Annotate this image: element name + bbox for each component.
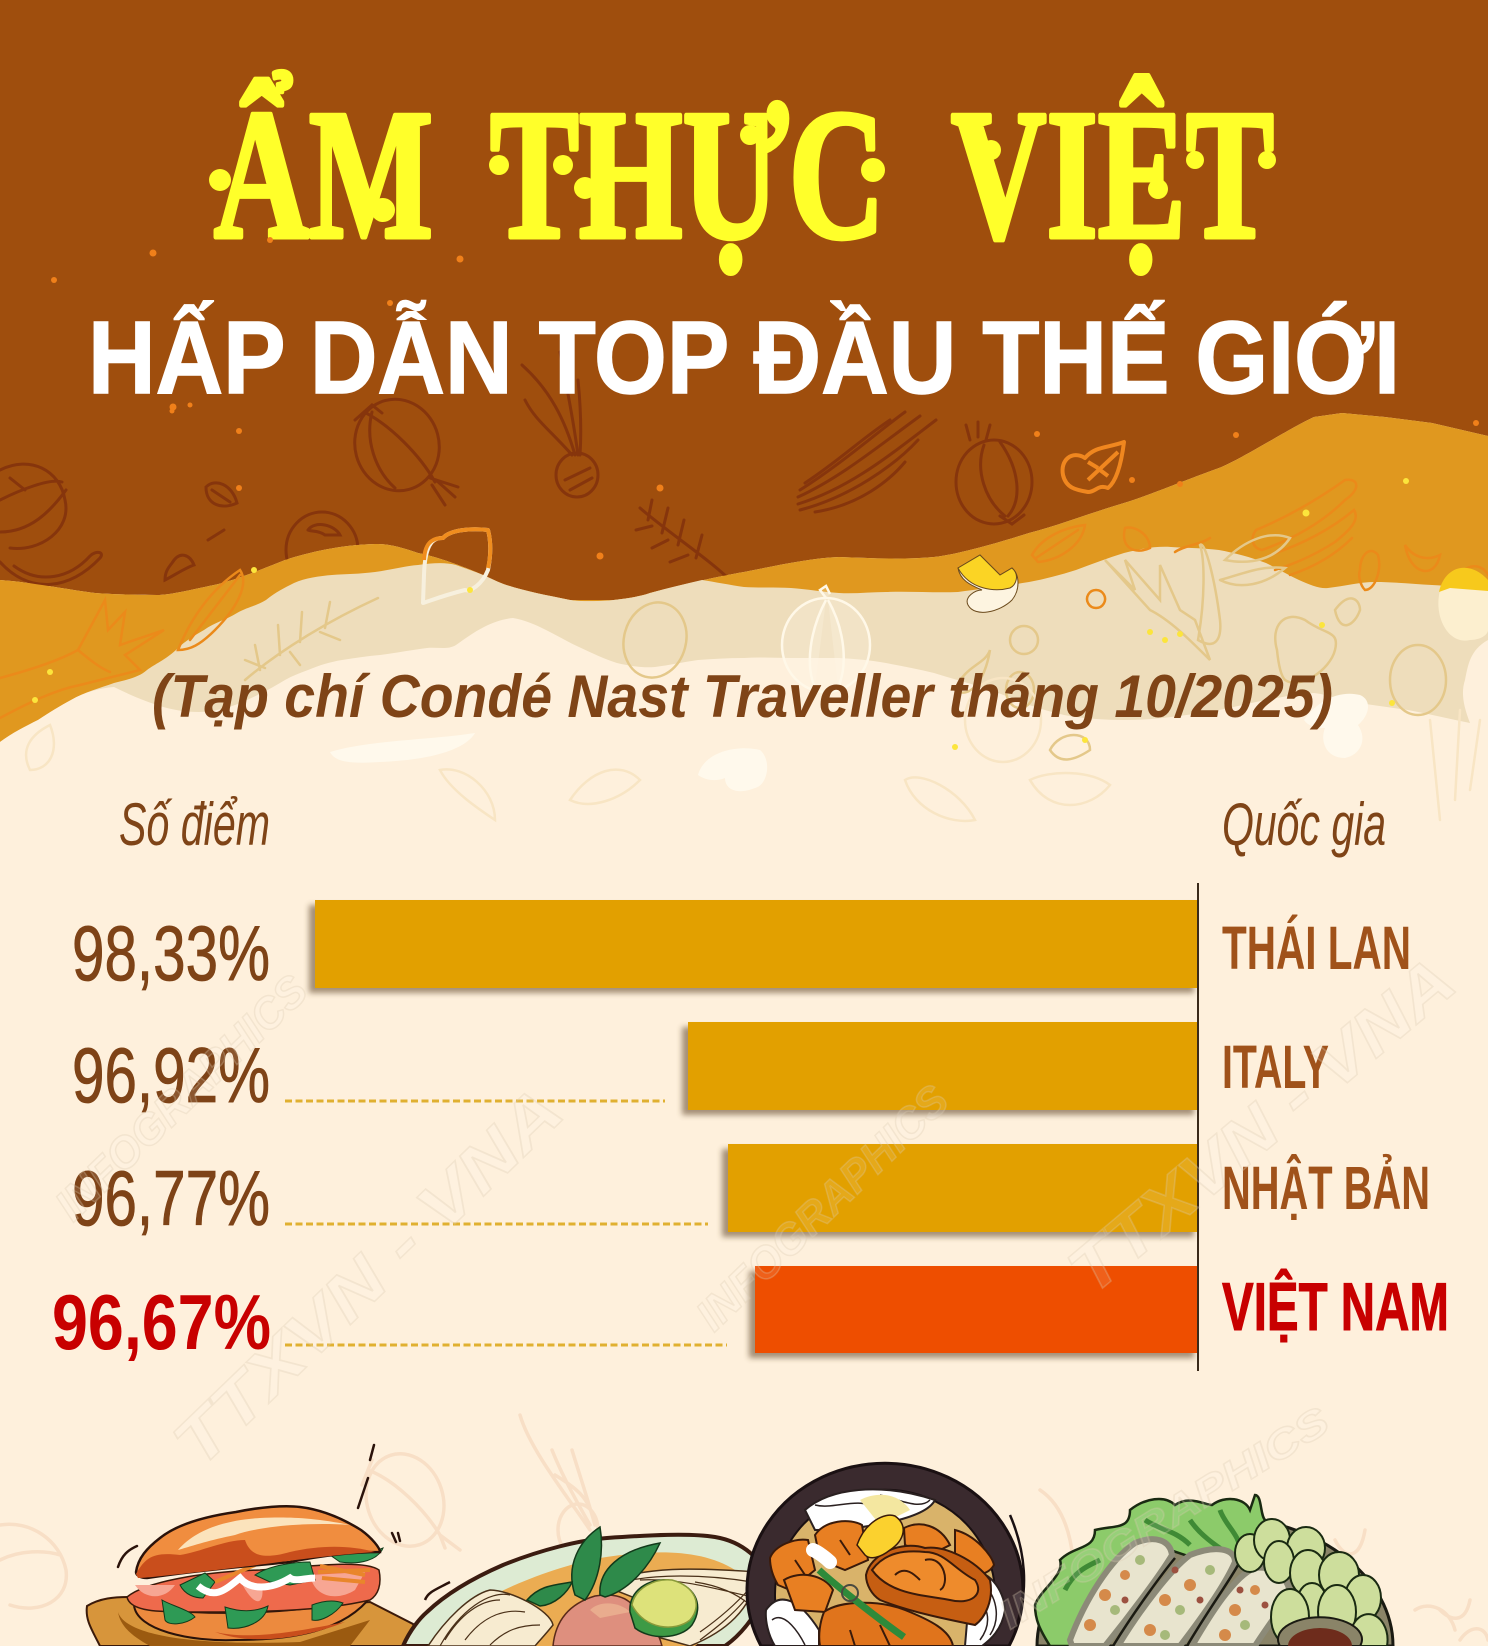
bar: Japan xyxy=(722,1144,1198,1237)
bar: Italy xyxy=(682,1022,1198,1115)
lime xyxy=(630,1580,698,1637)
watermarks: TTXVN - VNA xyxy=(1053,942,1469,1308)
carrots xyxy=(318,1566,370,1582)
doodles on orange band xyxy=(0,480,1488,718)
faint doodles behind food xyxy=(0,1415,1488,1640)
illustration: dark bowl with fried food xyxy=(747,1463,1024,1646)
doodle: orange leaf outline xyxy=(1063,442,1124,492)
title: THỰC xyxy=(490,72,885,278)
broth xyxy=(430,1552,735,1646)
doodle: lower white mushrooms and carrot xyxy=(330,694,1368,791)
axis line xyxy=(1197,883,1199,1371)
rolls xyxy=(1070,1539,1172,1646)
watermarks xyxy=(46,942,1469,1638)
doodles on cream area xyxy=(26,678,1480,821)
title: VIỆT xyxy=(951,72,1274,278)
illustration: banh mi sandwich xyxy=(87,1445,420,1646)
illustration: spring roll plate xyxy=(1035,1495,1393,1646)
bar: Vietnam xyxy=(749,1266,1198,1358)
dashed leader lines xyxy=(285,1101,727,1345)
title xyxy=(209,70,1276,278)
doodle: white onion xyxy=(782,586,870,692)
mayo xyxy=(198,1578,315,1593)
lettuce xyxy=(1035,1495,1265,1646)
white noodles xyxy=(766,1489,1005,1646)
cabbage xyxy=(860,1495,910,1525)
bar: Thailand xyxy=(309,900,1198,993)
value: 96,67%: 96,67% xyxy=(52,1278,271,1366)
label: Italy: ITALY xyxy=(1222,1033,1329,1101)
motion strokes xyxy=(118,1445,400,1567)
value: 96,77%: 96,77% xyxy=(72,1154,270,1242)
doodles on brown band xyxy=(0,352,1115,588)
top bun xyxy=(136,1506,380,1578)
orange wave band xyxy=(0,413,1488,742)
basil leaves xyxy=(572,1527,601,1600)
cucumber slices xyxy=(1235,1519,1388,1646)
doodle: glossy drop at right edge xyxy=(1438,568,1488,641)
greens xyxy=(162,1562,343,1628)
source line: (Tạp chí Condé Nast Traveller tháng 10/2025) xyxy=(152,663,1333,730)
lower bun xyxy=(134,1595,372,1640)
value: 96,92%: 96,92% xyxy=(72,1031,270,1119)
orange chunks xyxy=(770,1540,815,1590)
bar chart xyxy=(309,883,1199,1371)
doodle: mushroom xyxy=(958,555,1018,612)
noodles xyxy=(428,1569,758,1646)
doodle: white leaf outline xyxy=(423,529,490,603)
dipping sauce xyxy=(1278,1617,1362,1646)
pineapple xyxy=(857,1515,903,1558)
watermarks: INFOGRAPHICS xyxy=(687,1076,958,1340)
board xyxy=(87,1597,420,1646)
watermarks: INFOGRAPHICS xyxy=(46,966,317,1230)
watermarks: TTXVN - VNA xyxy=(158,1073,577,1480)
pale cream wave band xyxy=(0,547,1488,1000)
cream lower area xyxy=(0,618,1488,1646)
title: ẨM xyxy=(214,70,433,278)
center chunk xyxy=(866,1546,991,1625)
watermarks: INFOGRAPHICS xyxy=(991,1399,1337,1638)
illustration: pho bowl xyxy=(403,1527,772,1646)
header: brown band xyxy=(0,0,1488,601)
column heading: country: Quốc gia xyxy=(1222,791,1386,858)
doodles on pale band xyxy=(245,535,1446,759)
beef xyxy=(553,1595,662,1646)
scallion xyxy=(819,1570,904,1637)
column heading: score: Số điểm xyxy=(119,791,270,858)
value: 98,33%: 98,33% xyxy=(72,909,270,997)
filling xyxy=(127,1564,380,1612)
speckles xyxy=(32,237,1479,750)
